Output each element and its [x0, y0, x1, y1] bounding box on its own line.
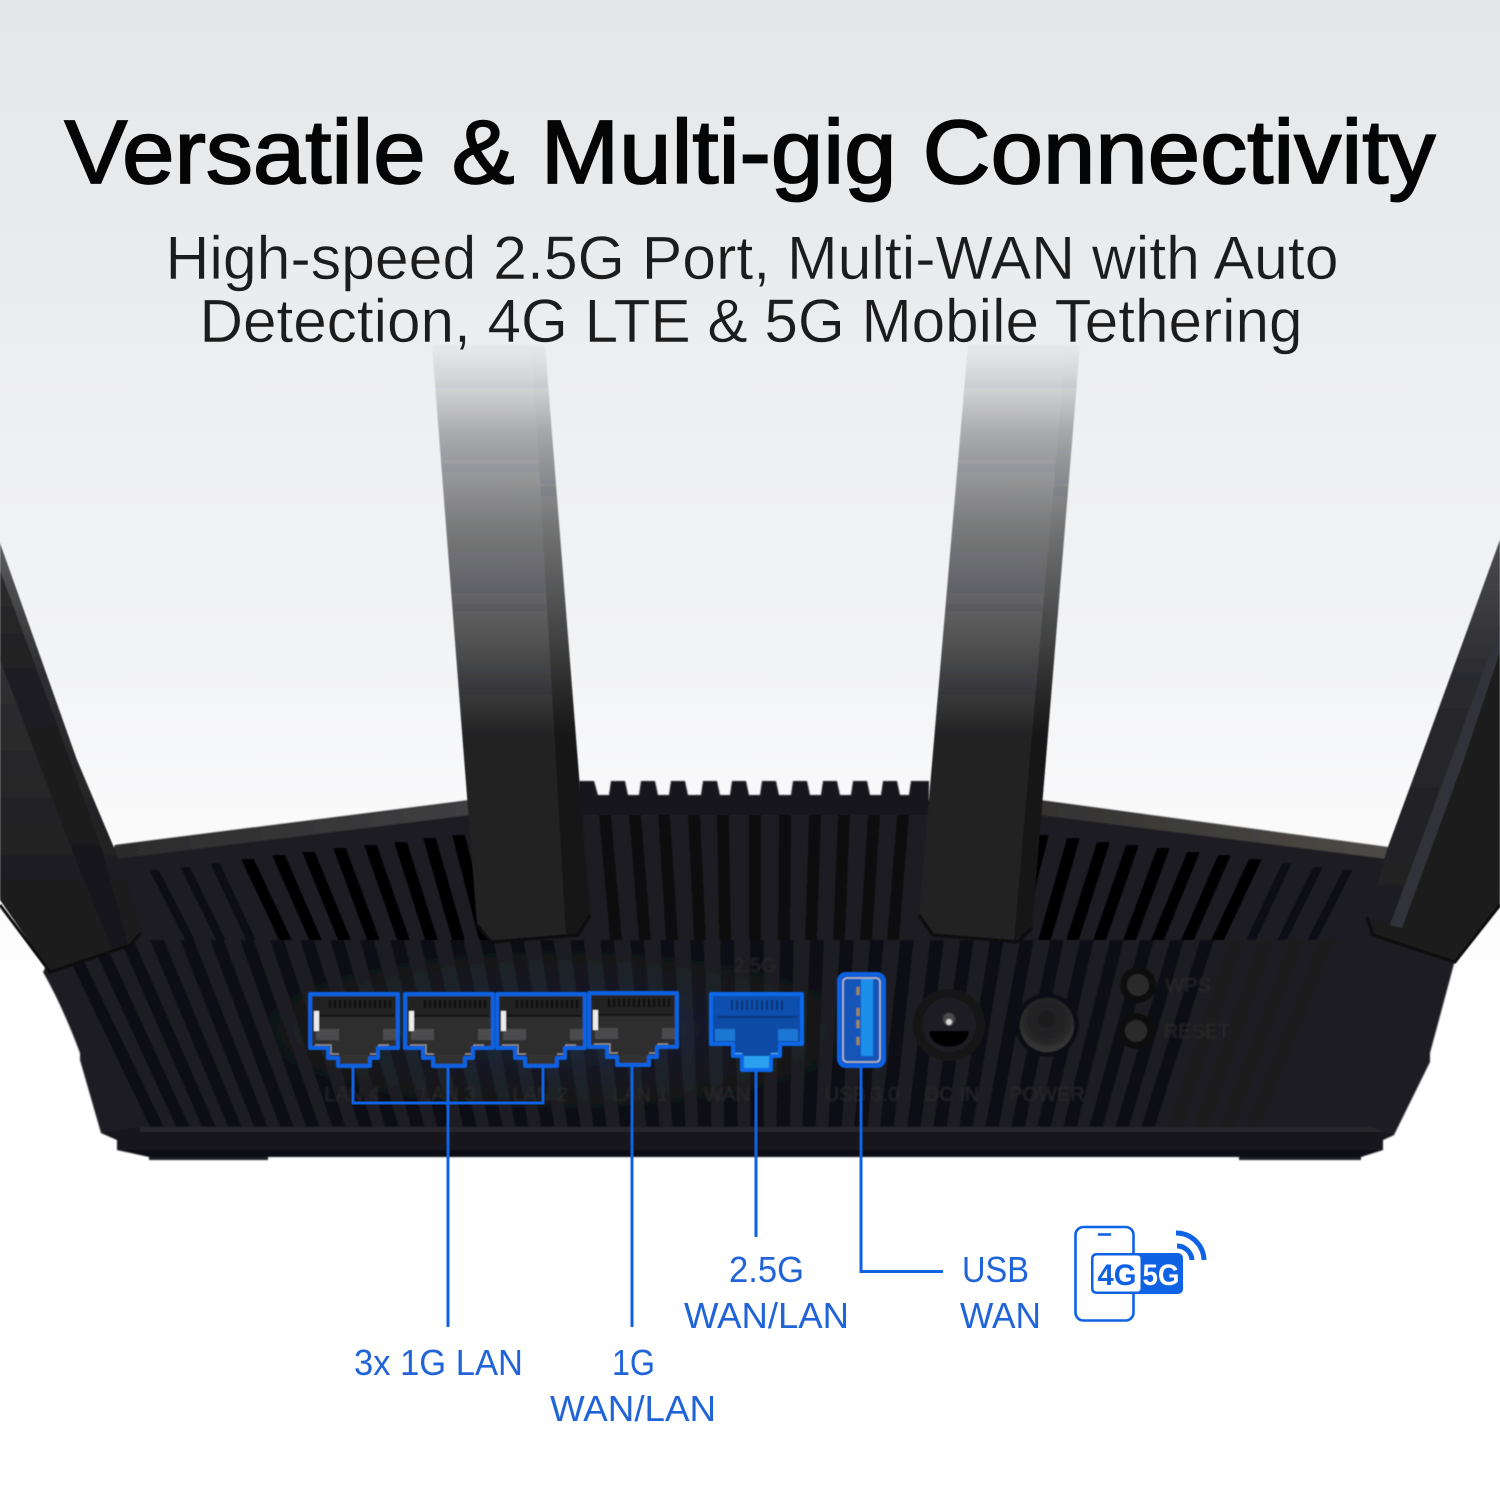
blue glow behind ports: [260, 950, 860, 1110]
label: 3x 1G LAN: 3x 1G LAN: [354, 1342, 523, 1383]
faint outer vent slots: [149, 863, 1353, 940]
subtitle: Detection, 4G LTE & 5G Mobile Tethering: [200, 287, 1302, 355]
LAN 1 / WAN port: [589, 993, 677, 1065]
WPS button: [1120, 967, 1156, 1003]
label: USB WAN: USB: [962, 1249, 1029, 1290]
icon: phone with 4G 5G signal: 4G: [1098, 1259, 1136, 1292]
LAN 3 port: [405, 994, 493, 1066]
faint silk-screen port labels: RESET: [1164, 1021, 1230, 1043]
faint silk-screen port labels: [324, 955, 1230, 1106]
LAN 4 port: [310, 994, 398, 1066]
top edge highlight strips: [115, 801, 1388, 859]
label: 1G WAN/LAN: 1G: [612, 1342, 655, 1383]
front lower bevel: [101, 1127, 1394, 1157]
label: 2.5G WAN/LAN: 2.5G: [729, 1249, 804, 1290]
reset button: [1118, 1013, 1154, 1049]
faint silk-screen port labels: LAN 3: [420, 1084, 476, 1106]
USB port highlighted: [839, 974, 884, 1066]
faint silk-screen port labels: USB 3.0: [825, 1084, 899, 1106]
faint silk-screen port labels: LAN 1: [612, 1084, 668, 1106]
label: USB WAN: [960, 1249, 1041, 1336]
LAN 2 port: [497, 994, 585, 1066]
right outer antenna: [1367, 540, 1500, 962]
router body: [43, 781, 1455, 1160]
faint silk-screen port labels: LAN 2: [512, 1084, 568, 1106]
faint silk-screen port labels: 2.5G: [733, 955, 777, 977]
faint silk-screen port labels: DC IN: [925, 1084, 979, 1106]
subtitle: [166, 224, 1338, 355]
label: 2.5G WAN/LAN: [684, 1249, 849, 1336]
connector: 1G WAN/LAN line: [630, 1066, 634, 1327]
DC in jack: [913, 989, 985, 1061]
connector: USB WAN line: [861, 1067, 943, 1272]
crenellated centre vent: [579, 781, 929, 815]
left outer antenna: [0, 543, 141, 972]
label: 2.5G WAN/LAN: WAN/LAN: [684, 1295, 849, 1336]
centre vent slots: [599, 815, 909, 940]
side vent slots: [241, 835, 1262, 940]
label: USB WAN: WAN: [960, 1295, 1041, 1336]
icon: phone with 4G 5G signal: 5G: [1142, 1259, 1180, 1292]
faint silk-screen port labels: WPS: [1165, 975, 1211, 997]
connector: 3x 1G LAN bracket and line: [353, 1066, 543, 1327]
title: Versatile & Multi-gig Connectivity: [64, 103, 1436, 203]
lower panel stripes: [73, 938, 1214, 1126]
faint silk-screen port labels: WAN: [704, 1084, 750, 1106]
power button: [1015, 993, 1079, 1057]
rear left antenna: [432, 345, 590, 942]
icon: phone with 4G 5G signal: [1076, 1227, 1204, 1320]
faint silk-screen port labels: POWER: [1009, 1084, 1085, 1106]
faint silk-screen port labels: LAN 4: [324, 1084, 380, 1106]
router: [0, 345, 1500, 1160]
2.5G WAN port highlighted: [711, 994, 802, 1070]
label: 1G WAN/LAN: WAN/LAN: [550, 1388, 716, 1429]
label: 1G WAN/LAN: [550, 1342, 716, 1429]
rear right antenna: [919, 345, 1080, 942]
connector: 2.5G WAN/LAN line: [754, 1070, 758, 1237]
subtitle: High-speed 2.5G Port, Multi-WAN with Auto: [166, 224, 1338, 292]
